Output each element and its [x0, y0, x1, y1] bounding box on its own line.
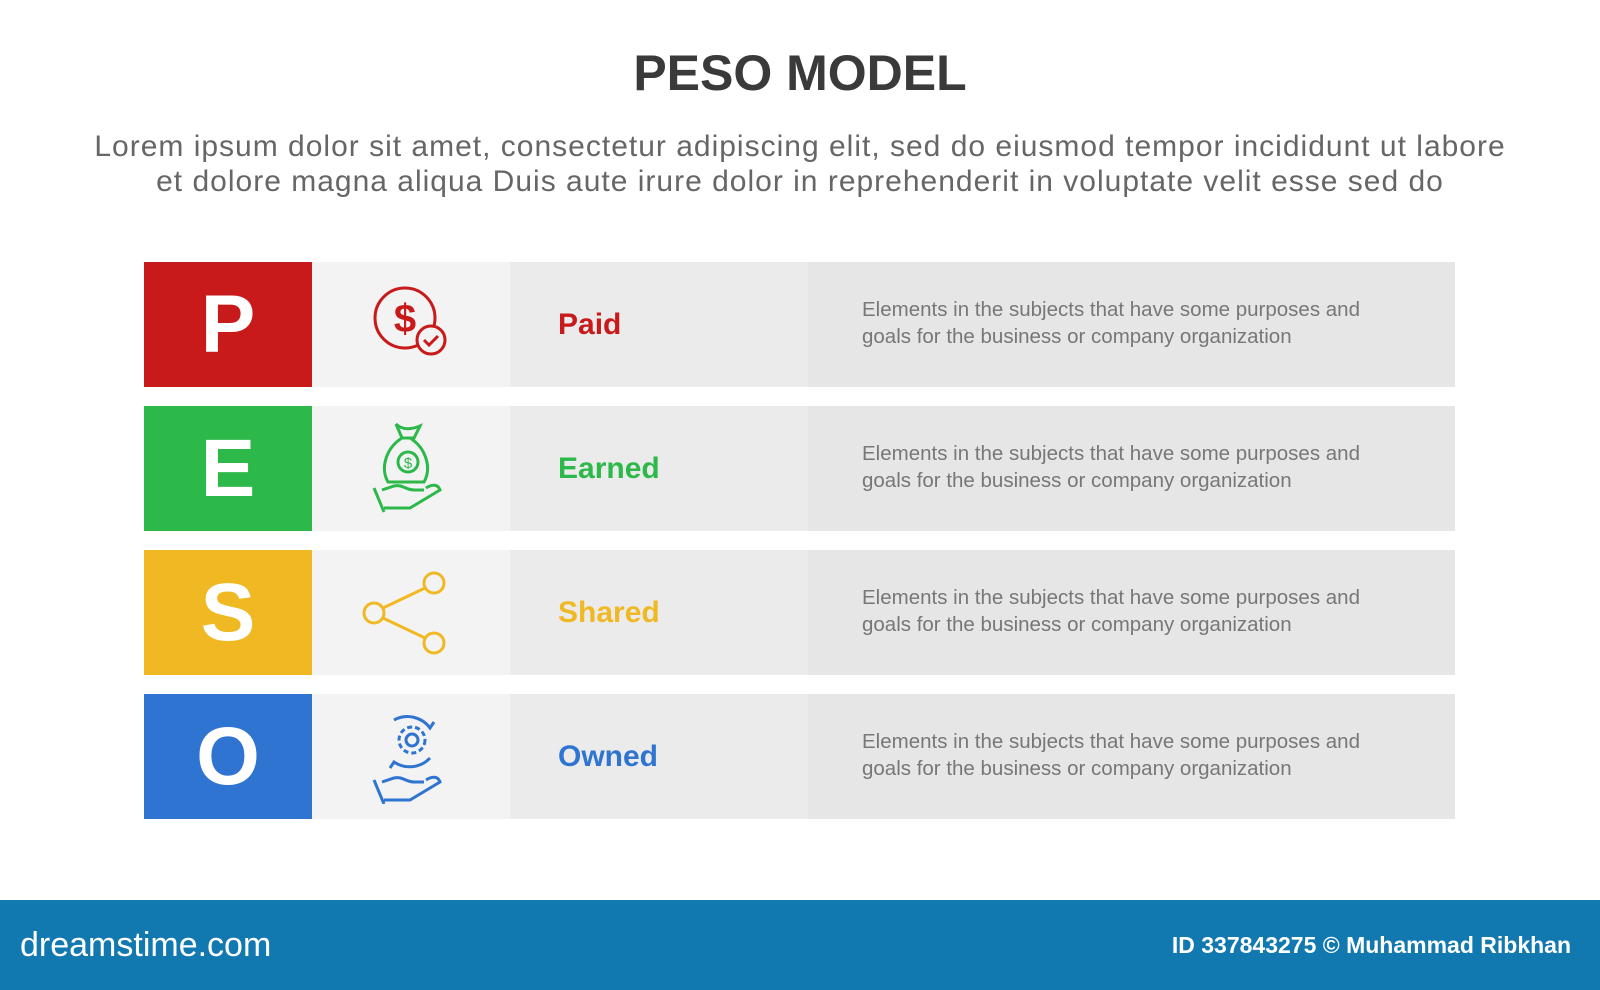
icon: money bag in hand	[312, 406, 510, 531]
description	[808, 406, 1455, 531]
description: goals for the business or company organization	[862, 613, 1292, 636]
letter P	[144, 262, 312, 387]
icon: dollar coin with check: $	[394, 297, 416, 341]
letter S	[144, 550, 312, 675]
label: Paid	[558, 308, 621, 341]
icon: dollar coin with check	[312, 262, 510, 387]
subtitle	[94, 130, 1506, 198]
title: PESO MODEL	[633, 45, 967, 101]
icon: money bag in hand: $	[404, 455, 413, 472]
label	[510, 406, 808, 531]
label	[510, 694, 808, 819]
description: Elements in the subjects that have some purposes and	[862, 442, 1360, 465]
description: Elements in the subjects that have some purposes and	[862, 298, 1360, 321]
description: goals for the business or company organization	[862, 325, 1292, 348]
row: earned	[144, 406, 1455, 531]
footer credit: ID 337843275 © Muhammad Ribkhan	[1172, 932, 1571, 958]
description: Elements in the subjects that have some purposes and	[862, 586, 1360, 609]
description	[808, 262, 1455, 387]
letter E: E	[201, 423, 255, 514]
label	[510, 550, 808, 675]
label: Owned	[558, 740, 658, 773]
description: goals for the business or company organization	[862, 469, 1292, 492]
description	[808, 694, 1455, 819]
row: owned	[144, 694, 1455, 819]
letter O	[144, 694, 312, 819]
label: Earned	[558, 452, 660, 485]
label	[510, 262, 808, 387]
description: Elements in the subjects that have some purposes and	[862, 730, 1360, 753]
subtitle: Lorem ipsum dolor sit amet, consectetur adipiscing elit, sed do eiusmod tempor incididunt ut labore	[94, 130, 1506, 163]
subtitle: et dolore magna aliqua Duis aute irure dolor in reprehenderit in voluptate velit esse sed do	[156, 165, 1444, 198]
letter S: S	[201, 567, 255, 658]
letter P: P	[201, 279, 255, 370]
footer bar	[0, 900, 1600, 990]
icon: share	[312, 550, 510, 675]
letter E	[144, 406, 312, 531]
row: paid	[144, 262, 1455, 387]
label: Shared	[558, 596, 660, 629]
row: shared	[144, 550, 1455, 675]
description	[808, 550, 1455, 675]
icon: gear cycle in hand	[312, 694, 510, 819]
description: goals for the business or company organization	[862, 757, 1292, 780]
footer brand: dreamstime.com	[20, 926, 271, 964]
letter O: O	[196, 711, 260, 802]
